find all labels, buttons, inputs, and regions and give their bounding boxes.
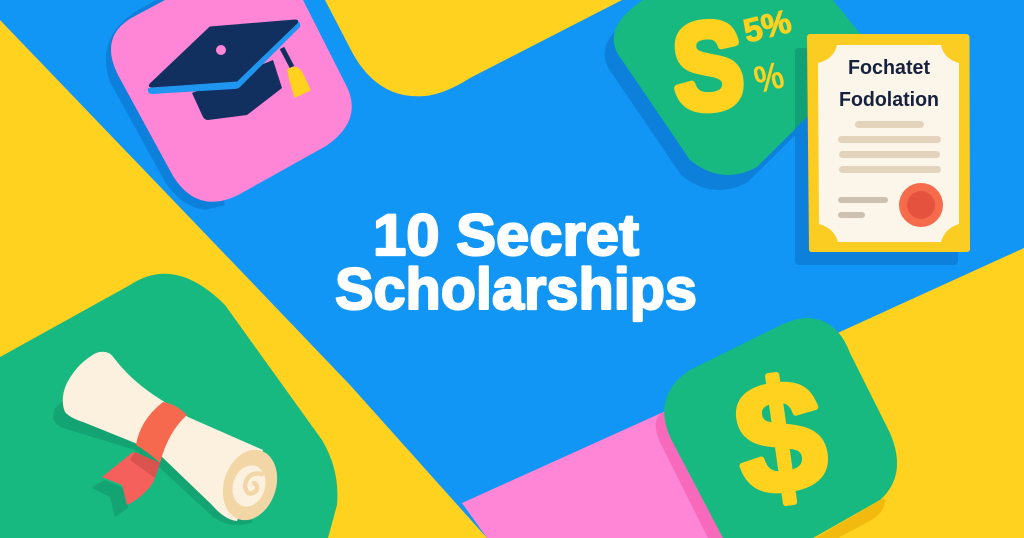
panel: green dollar card	[656, 318, 897, 538]
card shadow	[605, 15, 871, 190]
ribbon band	[136, 402, 187, 463]
icon: graduation cap	[148, 20, 310, 120]
card shadow	[106, 0, 225, 210]
heading: first line: Fochatet	[848, 57, 930, 79]
label: c/c: %	[750, 54, 788, 102]
card face	[664, 318, 897, 538]
ribbon tail	[102, 452, 160, 505]
cap lip	[148, 21, 300, 94]
icon: dollar sign: $	[725, 345, 836, 531]
panel: left yellow band	[0, 20, 487, 538]
icon: diploma scroll	[63, 352, 286, 527]
panel: top yellow shape	[325, 0, 622, 96]
scroll spiral	[245, 474, 262, 494]
tassel	[288, 68, 310, 97]
panel: bottom pink shape	[462, 409, 730, 538]
card face	[0, 274, 337, 538]
certificate paper	[818, 45, 959, 242]
cap board	[149, 20, 298, 87]
heading: second line: Fodolation	[839, 88, 939, 111]
scroll inner	[227, 461, 271, 511]
title line 2: Scholarships	[335, 257, 697, 322]
certificate frame	[807, 34, 970, 252]
card face	[111, 0, 352, 202]
signature lines	[838, 197, 888, 218]
pink shadow	[656, 412, 730, 538]
certificate shadow on green	[795, 48, 808, 129]
panel: green percent card	[605, 0, 880, 190]
cap button	[216, 45, 226, 55]
panel: bottom right yellow band	[640, 248, 1024, 538]
certificate shadow	[795, 48, 958, 265]
icon: diploma shadow	[53, 395, 253, 525]
text lines	[838, 121, 941, 173]
panel: green diploma card	[0, 274, 337, 538]
label: 5%: 5%	[740, 2, 795, 50]
card face	[614, 0, 880, 175]
scroll end	[214, 443, 286, 527]
icon: ribbon tail shadow	[92, 480, 128, 517]
cap base	[192, 60, 282, 120]
yellow shadow	[815, 498, 885, 538]
icon: seal	[899, 183, 943, 227]
panel: pink graduation cap card	[106, 0, 352, 210]
panel: certificate	[795, 34, 970, 265]
scroll body	[63, 352, 263, 521]
title line 1: 10 Secret	[373, 203, 639, 268]
icon: large S: S	[668, 0, 748, 137]
title	[335, 203, 697, 322]
ribbon overlap	[130, 452, 160, 478]
tassel cord	[282, 48, 292, 67]
